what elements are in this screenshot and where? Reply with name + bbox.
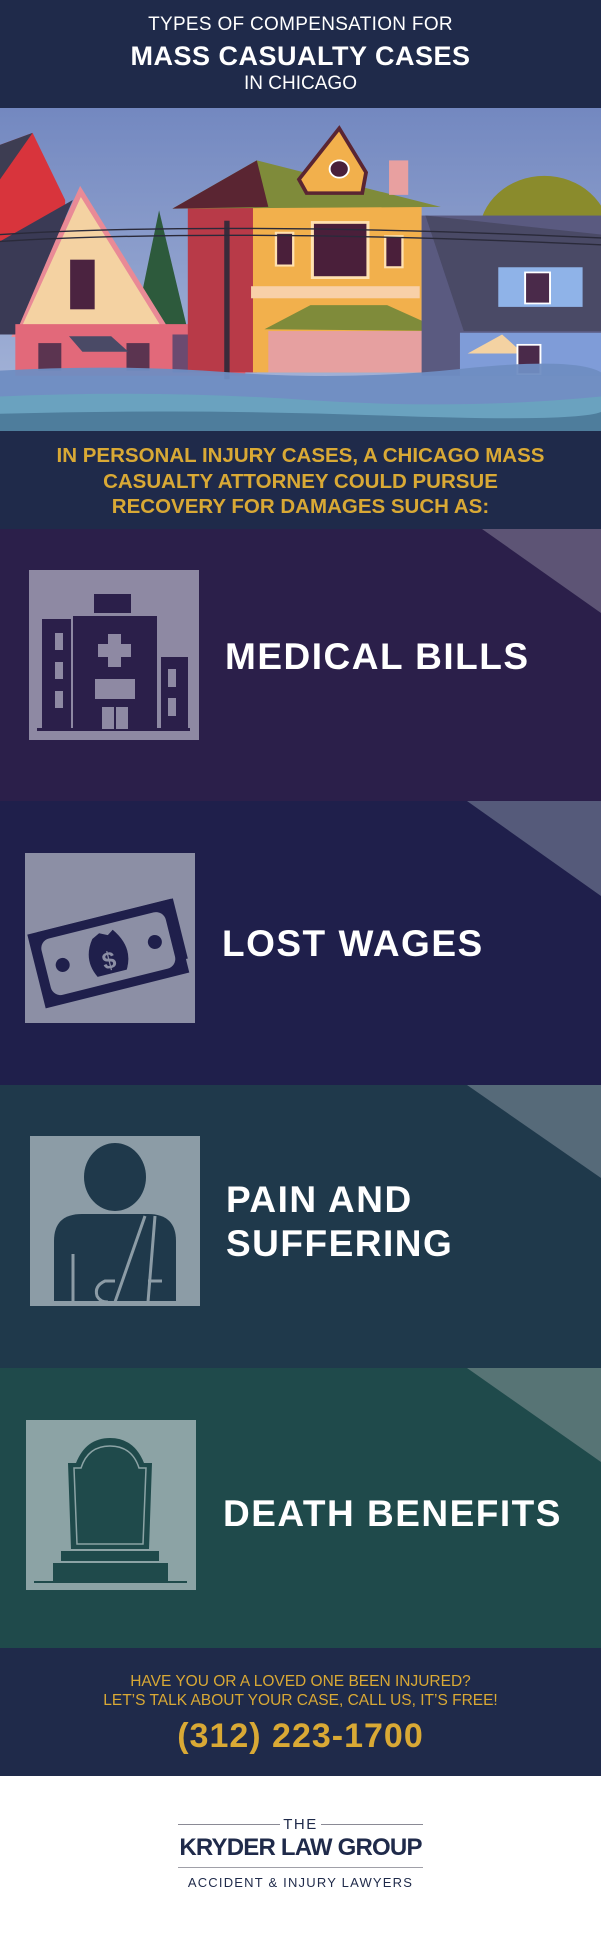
phone number: (312) 223-1700	[177, 1717, 424, 1755]
intro text band: IN PERSONAL INJURY CASES, A CHICAGO MASS	[57, 444, 544, 467]
intro text band: CASUALTY ATTORNEY COULD PURSUE	[103, 470, 498, 492]
panel: death benefits	[0, 1368, 601, 1648]
header line 1: TYPES OF COMPENSATION FOR	[148, 14, 453, 35]
title: medical bills: MEDICAL BILLS	[225, 636, 530, 677]
illustration: flooded houses	[0, 108, 601, 431]
icon: money: $	[99, 946, 120, 976]
panel: lost wages	[0, 801, 601, 1085]
title: death benefits: DEATH BENEFITS	[223, 1493, 562, 1534]
cta text	[103, 1673, 498, 1709]
call to action	[0, 1648, 601, 1776]
logo: THE	[283, 1816, 318, 1833]
icon: hospital	[29, 570, 199, 740]
title: pain and suffering: PAIN AND	[226, 1179, 413, 1220]
panel: pain and suffering	[0, 1085, 601, 1368]
title: pain and suffering	[226, 1179, 453, 1264]
icon: person with sling	[30, 1136, 200, 1306]
icon: tombstone	[26, 1420, 196, 1590]
icon: money	[25, 853, 195, 1023]
title: lost wages: LOST WAGES	[222, 923, 484, 964]
cta text: HAVE YOU OR A LOVED ONE BEEN INJURED?	[130, 1673, 471, 1690]
logo	[178, 1816, 423, 1890]
header	[0, 0, 601, 108]
title: pain and suffering: SUFFERING	[226, 1223, 453, 1264]
intro text band: RECOVERY FOR DAMAGES SUCH AS:	[112, 495, 489, 518]
panel: medical bills	[0, 529, 601, 801]
header line 3: IN CHICAGO	[244, 73, 357, 94]
intro text band	[0, 431, 601, 529]
cta text: LET’S TALK ABOUT YOUR CASE, CALL US, IT’S FREE!	[103, 1692, 498, 1709]
main title: MASS CASUALTY CASES	[130, 41, 471, 71]
logo: KRYDER LAW GROUP	[179, 1834, 422, 1861]
logo: ACCIDENT & INJURY LAWYERS	[188, 1875, 413, 1890]
